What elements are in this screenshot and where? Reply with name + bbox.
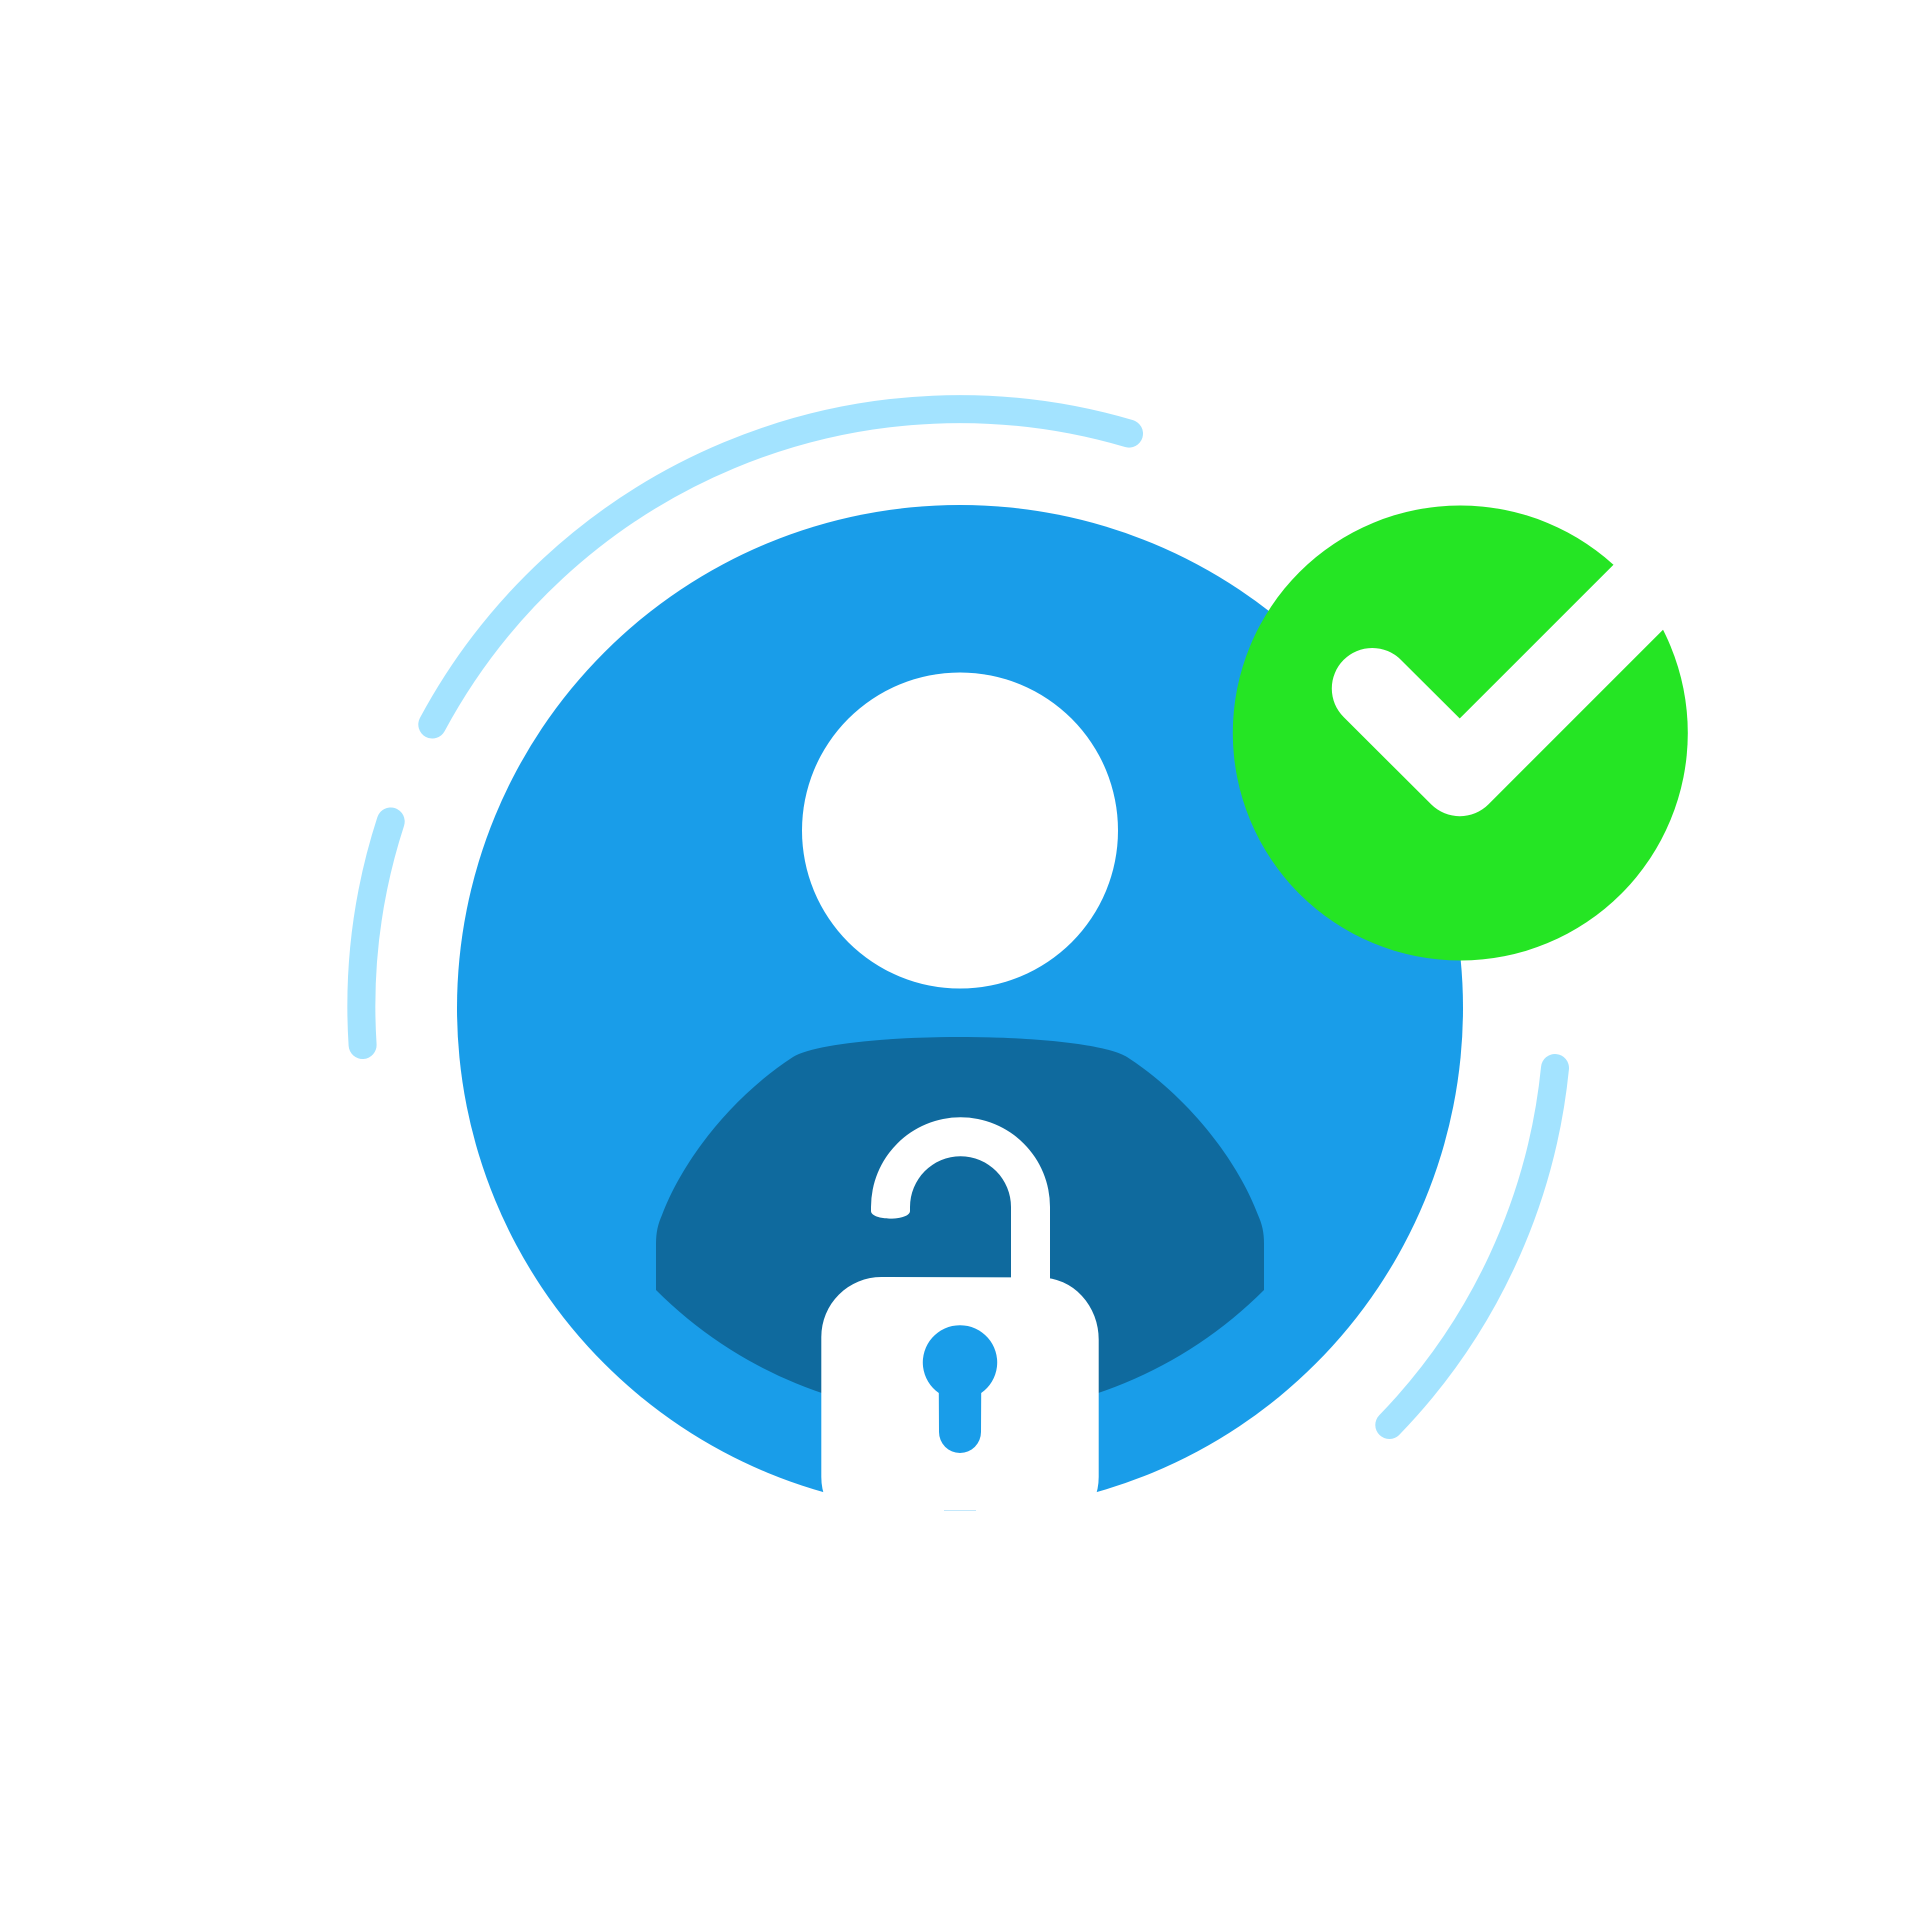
padlock keyhole [923,1325,997,1453]
badge circle [1233,506,1688,960]
arc: left [361,822,391,1045]
avatar circle [457,505,1463,1511]
icon: open padlock [821,1117,1099,1537]
arc: top [432,409,1129,724]
dashed arcs around avatar [361,409,1555,1425]
check mark [1372,515,1721,776]
padlock body [821,1277,1099,1537]
faint line under padlock [944,1510,976,1511]
avatar head [802,672,1118,988]
avatar body [656,1037,1264,1416]
verified badge [1233,506,1721,960]
padlock shackle [871,1117,1050,1280]
arc: right [1389,1068,1555,1425]
